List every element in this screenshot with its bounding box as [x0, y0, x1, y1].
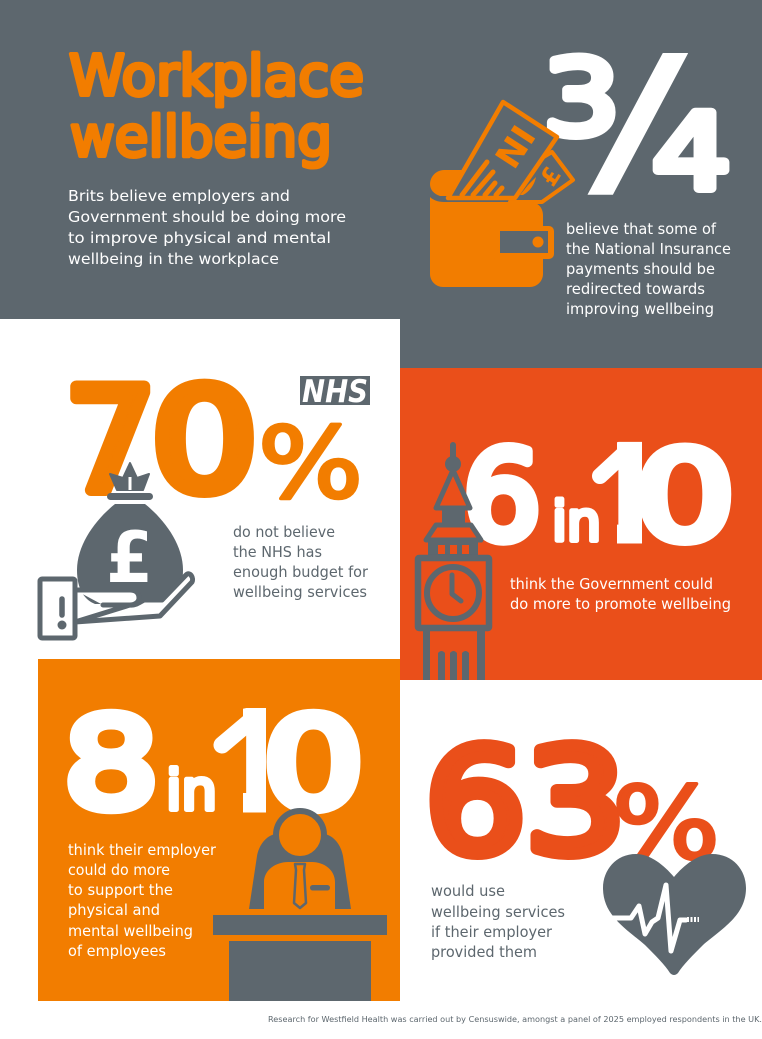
- stat: 8 in 10: in: [166, 758, 217, 822]
- text block: national insurance: payments should be: [566, 260, 715, 278]
- text block: employer: [68, 841, 217, 960]
- text block: government: [510, 575, 731, 613]
- text block: NHS budget: do not believe: [233, 523, 335, 541]
- text block: NHS budget: wellbeing services: [233, 583, 367, 601]
- stat: 70 percent: 0: [151, 359, 258, 524]
- text block: employer: mental wellbeing: [68, 922, 193, 940]
- text block: government: think the Government could: [510, 575, 713, 593]
- stat: 6 in 10: [466, 442, 732, 546]
- stat: 70 percent: [64, 359, 363, 524]
- icon: wallet with NI card: [430, 102, 573, 287]
- stat: 8 in 10: 1: [210, 681, 300, 846]
- stat: 63 percent: 3: [525, 718, 626, 886]
- text block: employer: of employees: [68, 942, 166, 960]
- text block: NHS budget: enough budget for: [233, 563, 369, 581]
- icon: person at desk: [213, 811, 387, 1001]
- icon: wallet with NI card: £: [535, 162, 567, 191]
- text block: national insurance: improving wellbeing: [566, 300, 714, 318]
- text block: national insurance: redirected towards: [566, 280, 705, 298]
- text block: intro: to improve physical and mental: [68, 229, 331, 247]
- stat: 8 in 10: 0: [263, 692, 364, 837]
- stat: 63 percent: %: [612, 765, 720, 882]
- text block: intro: Brits believe employers and: [68, 187, 290, 205]
- stat: 8 in 10: [67, 708, 360, 814]
- text block: government: do more to promote wellbeing: [510, 595, 731, 613]
- text block: wellbeing services: [431, 882, 565, 961]
- text block: NHS budget: the NHS has: [233, 543, 322, 561]
- panel: red government: [400, 368, 762, 680]
- title: Workplace: [69, 44, 364, 109]
- text block: intro: wellbeing in the workplace: [68, 250, 279, 268]
- icon: Big Ben: [418, 445, 489, 680]
- text block: wellbeing services: would use: [431, 882, 505, 900]
- stat: 70 percent: 7: [64, 359, 156, 524]
- stat: 6 in 10: 1: [581, 415, 674, 576]
- footnote: Research for Westfield Health was carried out by Censuswide, amongst a panel of 2025 employed respondents in the UK.: [268, 1015, 762, 1024]
- text block: national insurance: [566, 220, 731, 318]
- text block: wellbeing services: provided them: [431, 943, 537, 961]
- stat: three quarters: 4: [652, 92, 731, 214]
- text block: employer: to support the: [68, 881, 173, 899]
- panel: grey header: [0, 0, 762, 368]
- stat: 63 percent: 6: [425, 718, 526, 886]
- text block: employer: physical and: [68, 901, 160, 919]
- title: [69, 44, 364, 170]
- text block: wellbeing services: wellbeing services: [431, 903, 565, 921]
- stat: three quarters: 3: [543, 39, 620, 159]
- text block: intro: Government should be doing more: [68, 208, 346, 226]
- stat: 8 in 10: 8: [64, 692, 159, 837]
- text block: intro: [68, 187, 346, 268]
- stat: 6 in 10: 0: [635, 426, 735, 569]
- text block: employer: could do more: [68, 861, 170, 879]
- stat: 63 percent: [425, 718, 720, 886]
- stat: three quarters: [543, 19, 731, 220]
- text block: NHS budget: [233, 523, 369, 601]
- icon: money bag on hand: [40, 463, 193, 638]
- stat: 6 in 10: 6: [463, 426, 541, 569]
- panel: orange employer: [38, 659, 400, 1001]
- icon: heart with pulse: [603, 854, 746, 975]
- stat: 70 percent: %: [258, 407, 363, 521]
- title: wellbeing: [70, 105, 332, 170]
- stat: three quarters: /: [588, 19, 688, 220]
- icon: wallet with NI card: NI: [488, 119, 544, 176]
- text block: wellbeing services: if their employer: [431, 923, 553, 941]
- text block: national insurance: believe that some of: [566, 220, 717, 238]
- icon: money bag on hand: £: [106, 517, 153, 599]
- text block: national insurance: the National Insurance: [566, 240, 731, 258]
- icon: NHS logo: NHS: [302, 374, 368, 410]
- text block: employer: think their employer: [68, 841, 217, 859]
- stat: 6 in 10: in: [552, 490, 601, 554]
